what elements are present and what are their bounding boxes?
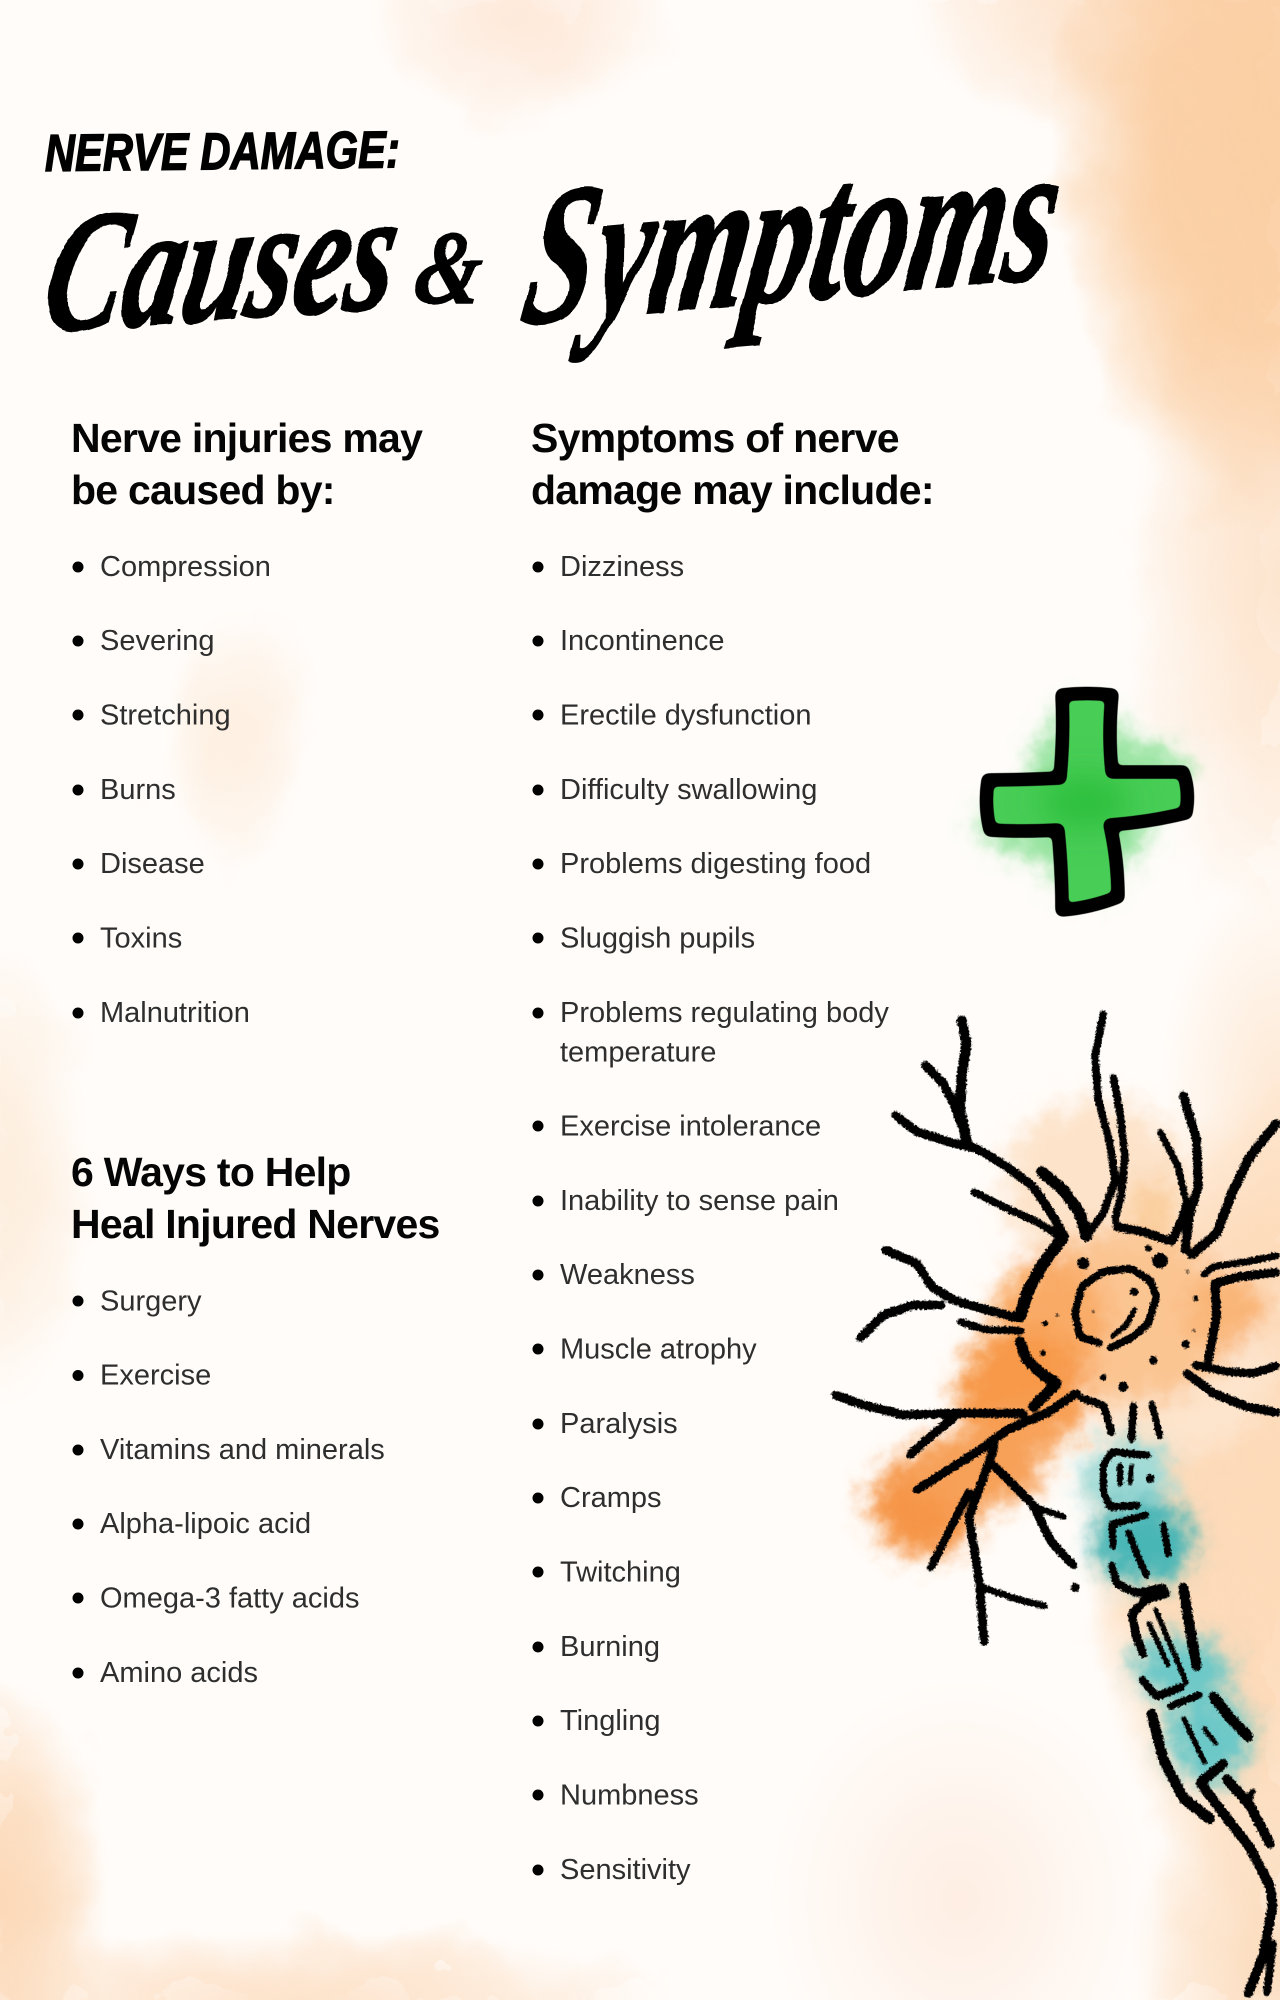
- list: causes: Malnutrition: [100, 997, 250, 1029]
- list: healing: Alpha-lipoic acid: [100, 1508, 311, 1540]
- panel: nerve injury causes: [71, 415, 423, 1029]
- list: symptoms: Muscle atrophy: [560, 1334, 757, 1366]
- neuron ink lines: [835, 1013, 1277, 1993]
- neuron watercolor myelin sheaths: [1081, 1439, 1250, 1784]
- list: healing: Surgery: [100, 1285, 202, 1317]
- list: healing: Exercise: [100, 1360, 211, 1392]
- list: symptoms: Cramps: [560, 1482, 662, 1514]
- list: symptoms: Inability to sense pain: [560, 1185, 839, 1217]
- list: symptoms: Difficulty swallowing: [560, 774, 817, 806]
- list: symptoms: Sensitivity: [560, 1854, 691, 1886]
- heading: symptoms: Symptoms of nerve: [531, 415, 899, 461]
- list: healing: Omega-3 fatty acids: [100, 1582, 360, 1614]
- list: causes: Stretching: [100, 700, 231, 732]
- heading: causes: be caused by:: [71, 467, 335, 513]
- list: healing: Vitamins and minerals: [100, 1434, 385, 1466]
- heading: causes: Nerve injuries may: [71, 415, 423, 461]
- list: causes: Burns: [100, 774, 176, 806]
- panel: symptoms: [531, 415, 934, 1886]
- list: symptoms: Twitching: [560, 1556, 681, 1588]
- illustration: neuron: [835, 1013, 1277, 1993]
- list: healing: [72, 1285, 385, 1689]
- neuron watercolor soma: [870, 1100, 1277, 1557]
- list: healing: Amino acids: [100, 1657, 258, 1689]
- list: symptoms: Problems digesting food: [560, 848, 871, 880]
- icon: green medical cross: [977, 694, 1188, 910]
- heading: healing: Heal Injured Nerves: [71, 1201, 440, 1247]
- list: symptoms: Tingling: [560, 1705, 660, 1737]
- list: symptoms: [532, 551, 889, 1886]
- list: symptoms: temperature: [560, 1036, 716, 1068]
- title: Causes & Symptoms: &: [409, 209, 491, 326]
- heading: healing: 6 Ways to Help: [71, 1149, 351, 1195]
- list: causes: Toxins: [100, 922, 182, 954]
- list: symptoms: Exercise intolerance: [560, 1110, 821, 1142]
- list: causes: [72, 551, 271, 1029]
- list: symptoms: Numbness: [560, 1780, 699, 1812]
- panel: healing methods: [71, 1149, 440, 1689]
- list: causes: Severing: [100, 625, 214, 657]
- title: Causes & Symptoms: [31, 101, 1076, 370]
- subtitle: Nerve Damage: NERVE DAMAGE:: [45, 121, 400, 183]
- list: symptoms: Sluggish pupils: [560, 922, 755, 954]
- list: symptoms: Incontinence: [560, 625, 724, 657]
- list: symptoms: Problems regulating body: [560, 997, 889, 1029]
- title: Causes & Symptoms: Causes: [31, 155, 414, 370]
- list: symptoms: Weakness: [560, 1259, 695, 1291]
- list: symptoms: Erectile dysfunction: [560, 700, 811, 732]
- list: causes: Disease: [100, 848, 205, 880]
- heading: symptoms: damage may include:: [531, 467, 934, 513]
- list: causes: Compression: [100, 551, 271, 583]
- list: symptoms: Paralysis: [560, 1408, 678, 1440]
- list: symptoms: Dizziness: [560, 551, 684, 583]
- list: symptoms: Burning: [560, 1631, 660, 1663]
